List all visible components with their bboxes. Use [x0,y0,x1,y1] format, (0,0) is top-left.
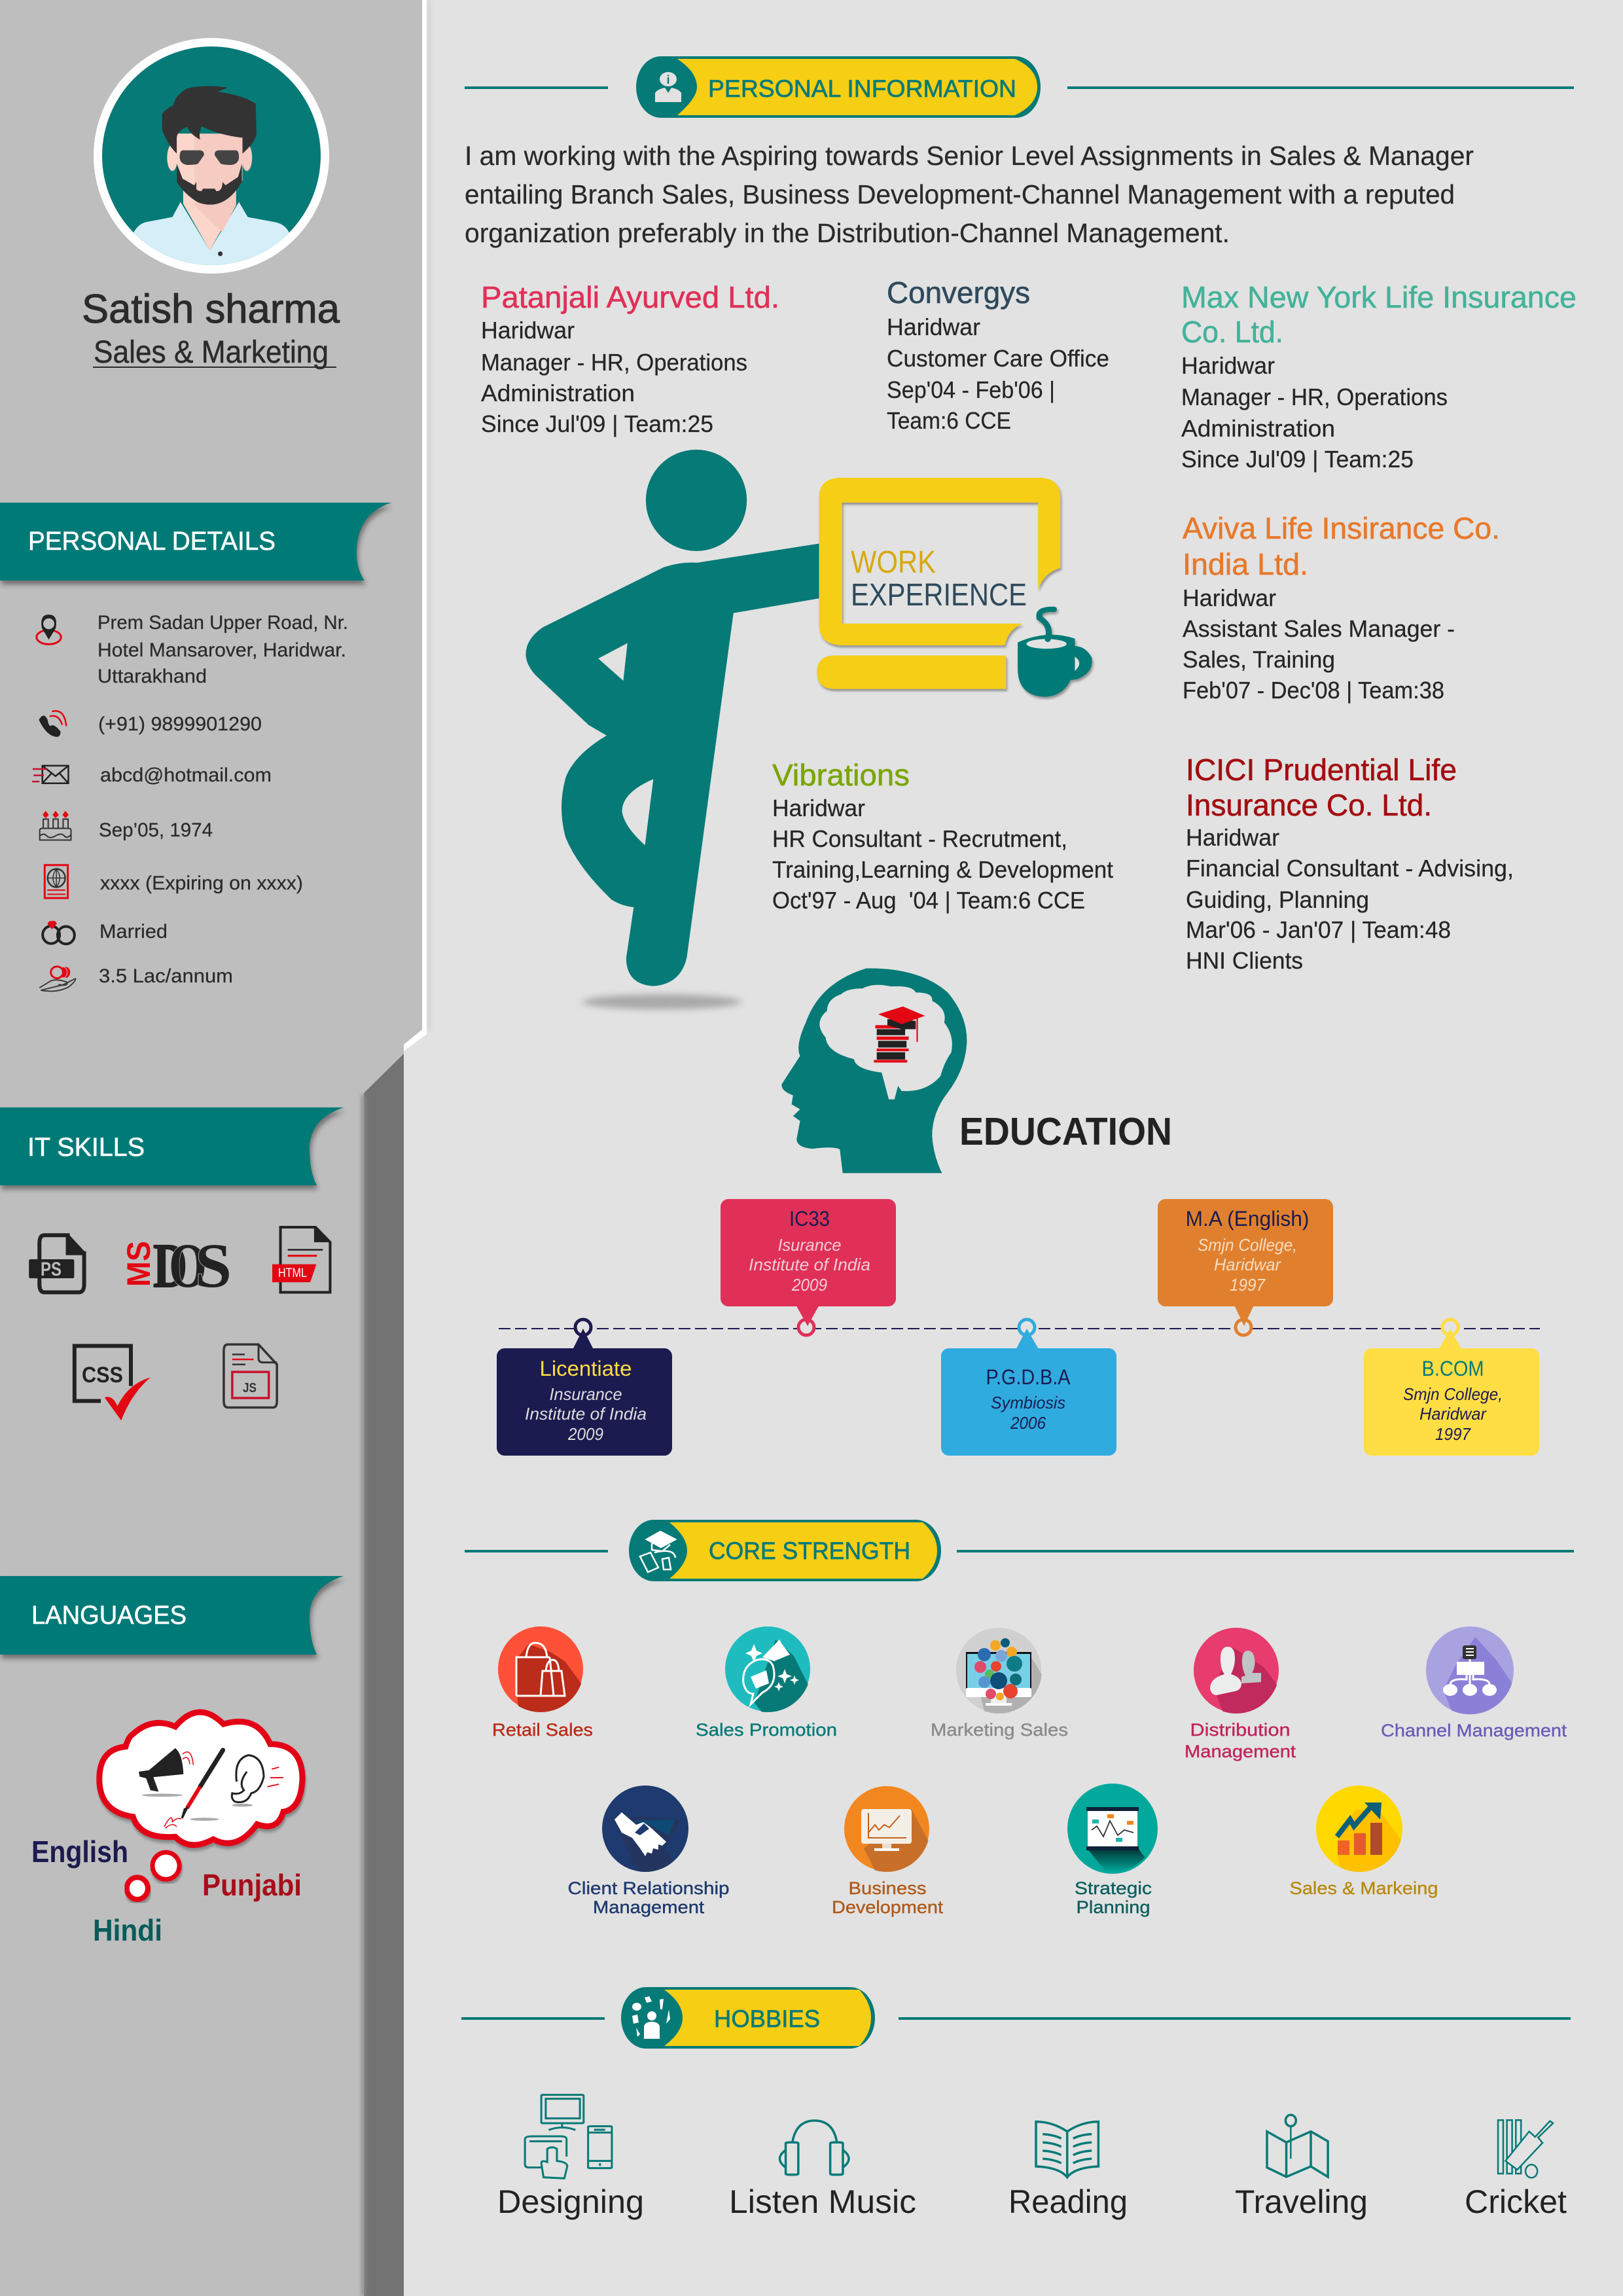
skill: retail sales: Retail Sales [492,1720,593,1740]
icon: phone [39,711,66,737]
card: licentiate: Licentiate [539,1357,632,1380]
banner: personal details: PERSONAL DETAILS [28,527,276,556]
job: vibrations [772,758,1113,914]
skill: marketing sales [931,1628,1068,1740]
icon: ms dos: D [153,1230,187,1300]
card: ic33: 2009 [791,1275,827,1295]
card: licentiate: Insurance [550,1384,622,1404]
language: english: English [31,1835,128,1869]
card: pgdba: 2006 [1010,1413,1046,1433]
icon: mail [32,766,68,783]
language: punjabi: Punjabi [202,1868,302,1902]
skill: client relationship management: Client Relationship [568,1878,729,1898]
card: bcom: Smjn College, [1403,1384,1503,1404]
job: max new york life [1181,280,1577,473]
job: patanjali: Administration [481,380,635,406]
address: Uttarakhand [98,666,207,687]
phone number: (+91) 9899901290 [98,713,262,735]
card: ma english: Haridwar [1214,1255,1281,1274]
name: Satish sharma [82,287,340,332]
job: vibrations: HR Consultant - Recrutment, [772,825,1067,852]
job: max new york life: Since Jul'09 | Team:25 [1181,446,1414,473]
hobby: listen music: Listen Music [729,2183,916,2220]
card: bcom: B.COM [1421,1357,1484,1380]
hobby: traveling: Traveling [1235,2183,1368,2220]
icon: work experience monitor: EXPERIENCE [851,578,1027,613]
icon: ms dos: MS [120,1241,157,1287]
education timeline [499,1302,1540,1354]
marital status: Married [99,921,168,942]
card: pgdba: P.G.D.B.A [986,1365,1071,1389]
job title: Sales & Marketing [94,335,329,370]
banner: languages: LANGUAGES [31,1601,187,1630]
icon: salary hand [39,967,75,991]
card: ma english: M.A (English) [1186,1207,1309,1230]
job: icici prudential: Mar'06 - Jan'07 | Team:48 [1186,916,1451,943]
card: pgdba [941,1348,1116,1456]
hobby: listen music [729,2121,916,2220]
job: convergys: Customer Care Office [887,345,1109,372]
address: Prem Sadan Upper Road, Nr. [98,612,348,634]
marker: ma [1233,1302,1255,1335]
section header: personal information [465,56,1574,118]
card: pgdba: Symbiosis [991,1393,1065,1412]
job: convergys: Team:6 CCE [887,407,1011,434]
education heading: EDUCATION [959,1110,1172,1153]
skill: retail sales [493,1626,593,1736]
job: icici prudential: Haridwar [1186,824,1279,851]
profile summary: organization preferably in the Distribution-Channel Management. [465,218,1230,248]
icon: rings [43,921,75,944]
job: patanjali: Patanjali Ayurved Ltd. [481,280,779,314]
banner: personal details [0,503,391,581]
it skills icons [29,1227,330,1420]
banner: it skills: IT SKILLS [27,1133,145,1162]
sidebar panel [0,0,431,2296]
icon: language thought cloud [99,1712,302,1899]
card: licentiate: 2009 [567,1424,603,1444]
icon: photoshop file: PS [41,1259,62,1280]
marker: bcom [1436,1319,1464,1354]
icon: person info: i [666,73,670,86]
profile summary: I am working with the Aspiring towards Senior Level Assignments in Sales & Manager [465,141,1474,171]
card: ic33: Institute of India [749,1255,870,1274]
salary: 3.5 Lac/annum [99,965,233,987]
icon: html file [272,1227,330,1292]
icon: ms dos: O [169,1230,207,1300]
skill: distribution management: Management [1185,1742,1296,1761]
job: aviva: Haridwar [1183,584,1276,611]
job: aviva: Sales, Training [1183,646,1335,673]
profile summary [465,141,1474,248]
job: aviva [1183,511,1500,704]
card: ic33: Isurance [777,1235,842,1255]
skill: strategic planning: Strategic [1075,1878,1152,1898]
icon: ms dos [120,1230,232,1300]
icon: js file: JS [243,1381,257,1395]
card: bcom: Haridwar [1419,1404,1487,1424]
profile avatar [94,38,329,277]
job: vibrations: Vibrations [772,758,910,792]
icon: work experience monitor: WORK [851,545,936,580]
skill: business development: Business [848,1878,927,1898]
job: patanjali: Haridwar [481,317,575,344]
job: convergys: Sep'04 - Feb'06 | [887,376,1055,403]
job: aviva: Aviva Life Insirance Co. [1183,511,1500,545]
banner: it skills [0,1107,344,1185]
hobby: reading [1008,2122,1128,2220]
address [98,612,348,687]
job: convergys: Convergys [887,276,1030,310]
marker: licentiate [573,1319,594,1350]
skill: sales and marketing [1289,1785,1438,1898]
language: hindi: Hindi [93,1913,162,1947]
icon: leaning figure [526,450,819,1009]
icon: person info [655,72,681,102]
hobby: designing [497,2095,644,2220]
passport text: xxxx (Expiring on xxxx) [100,872,303,894]
job: max new york life: Haridwar [1181,352,1275,379]
job: icici prudential: Financial Consultant - Advising, [1186,855,1514,882]
skill: sales and marketing: Sales & Markeing [1289,1878,1438,1898]
banner: languages [0,1576,344,1655]
card: ma english: 1997 [1230,1275,1266,1295]
card: bcom [1364,1348,1539,1456]
skill: marketing sales: Marketing Sales [931,1720,1068,1740]
icon: photoshop file [29,1234,85,1292]
card: ic33: IC33 [789,1207,830,1230]
icon: graduation tools [640,1532,675,1572]
skill: client relationship management: Management [593,1897,705,1917]
job: vibrations: Training,Learning & Development [772,856,1113,883]
job: patanjali: Since Jul'09 | Team:25 [481,410,713,437]
section header: hobbies [461,1987,1571,2049]
job: max new york life: Administration [1181,415,1335,442]
marker: pgdba [1014,1319,1041,1354]
marker: ic33 [794,1302,821,1335]
icon: coffee cup [1018,609,1092,697]
skill: business development: Development [832,1897,944,1917]
skill: distribution management: Distribution [1190,1720,1291,1740]
icon: education head [781,969,967,1173]
skill: client relationship management [568,1785,729,1917]
skill: sales promotion: Sales Promotion [696,1720,837,1740]
section header: core strength: CORE STRENGTH [709,1537,910,1564]
skill: business development [832,1786,944,1917]
card: ic33 [721,1199,896,1306]
job: aviva: India Ltd. [1183,547,1308,581]
section header: hobbies: HOBBIES [714,2005,820,2032]
job: max new york life: Co. Ltd. [1181,315,1283,349]
profile summary: entailing Branch Sales, Business Development-Channel Management with a reputed [465,179,1455,209]
skill: channel management [1381,1626,1567,1740]
card: ma english [1158,1199,1333,1306]
job: convergys: Haridwar [887,314,980,340]
job: icici prudential [1186,753,1514,974]
email: abcd@hotmail.com [100,764,272,786]
personal details list [32,612,348,991]
icon: passport [45,865,68,898]
job: aviva: Feb'07 - Dec'08 | Team:38 [1183,677,1444,704]
icon: js file [224,1344,277,1408]
hobby: reading: Reading [1008,2183,1128,2220]
icon: birthday cake [40,811,71,840]
job: vibrations: Haridwar [772,795,865,821]
job: max new york life: Max New York Life Insurance [1181,280,1577,314]
icon: work experience monitor [817,478,1092,697]
job: icici prudential: HNI Clients [1186,947,1303,974]
icon: location pin [37,615,61,644]
card: licentiate [497,1348,672,1456]
job: icici prudential: ICICI Prudential Life [1186,753,1457,787]
skill: strategic planning [1067,1784,1158,1917]
section header: personal information: PERSONAL INFORMATION [708,75,1016,102]
hobby: designing: Designing [497,2183,644,2220]
job: max new york life: Manager - HR, Operations [1181,384,1448,410]
hobby: cricket [1465,2120,1567,2220]
card: bcom: 1997 [1435,1424,1471,1444]
icon: html file: HTML [278,1266,307,1280]
icon: hobby people [632,1996,670,2039]
icon: css [75,1346,151,1420]
skill: distribution management [1185,1628,1296,1761]
job: patanjali [481,280,779,437]
job: patanjali: Manager - HR, Operations [481,349,747,376]
address: Hotel Mansarover, Haridwar. [98,639,346,661]
birth date: Sep’05, 1974 [99,819,213,841]
job: vibrations: Oct'97 - Aug '04 | Team:6 CCE [772,887,1085,914]
card: ma english: Smjn College, [1198,1235,1297,1255]
section header: core strength [465,1520,1574,1581]
job: aviva: Assistant Sales Manager - [1183,615,1455,642]
skill: channel management: Channel Management [1381,1721,1567,1740]
icon: css: CSS [82,1363,123,1388]
skill: strategic planning: Planning [1076,1897,1150,1917]
job: convergys [887,276,1109,434]
job: icici prudential: Insurance Co. Ltd. [1186,788,1432,822]
icon: ms dos: S [195,1230,232,1300]
hobby: traveling [1235,2115,1368,2220]
hobby: cricket: Cricket [1465,2183,1567,2220]
card: licentiate: Institute of India [525,1404,647,1424]
job: icici prudential: Guiding, Planning [1186,886,1369,913]
skill: sales promotion [696,1626,837,1740]
